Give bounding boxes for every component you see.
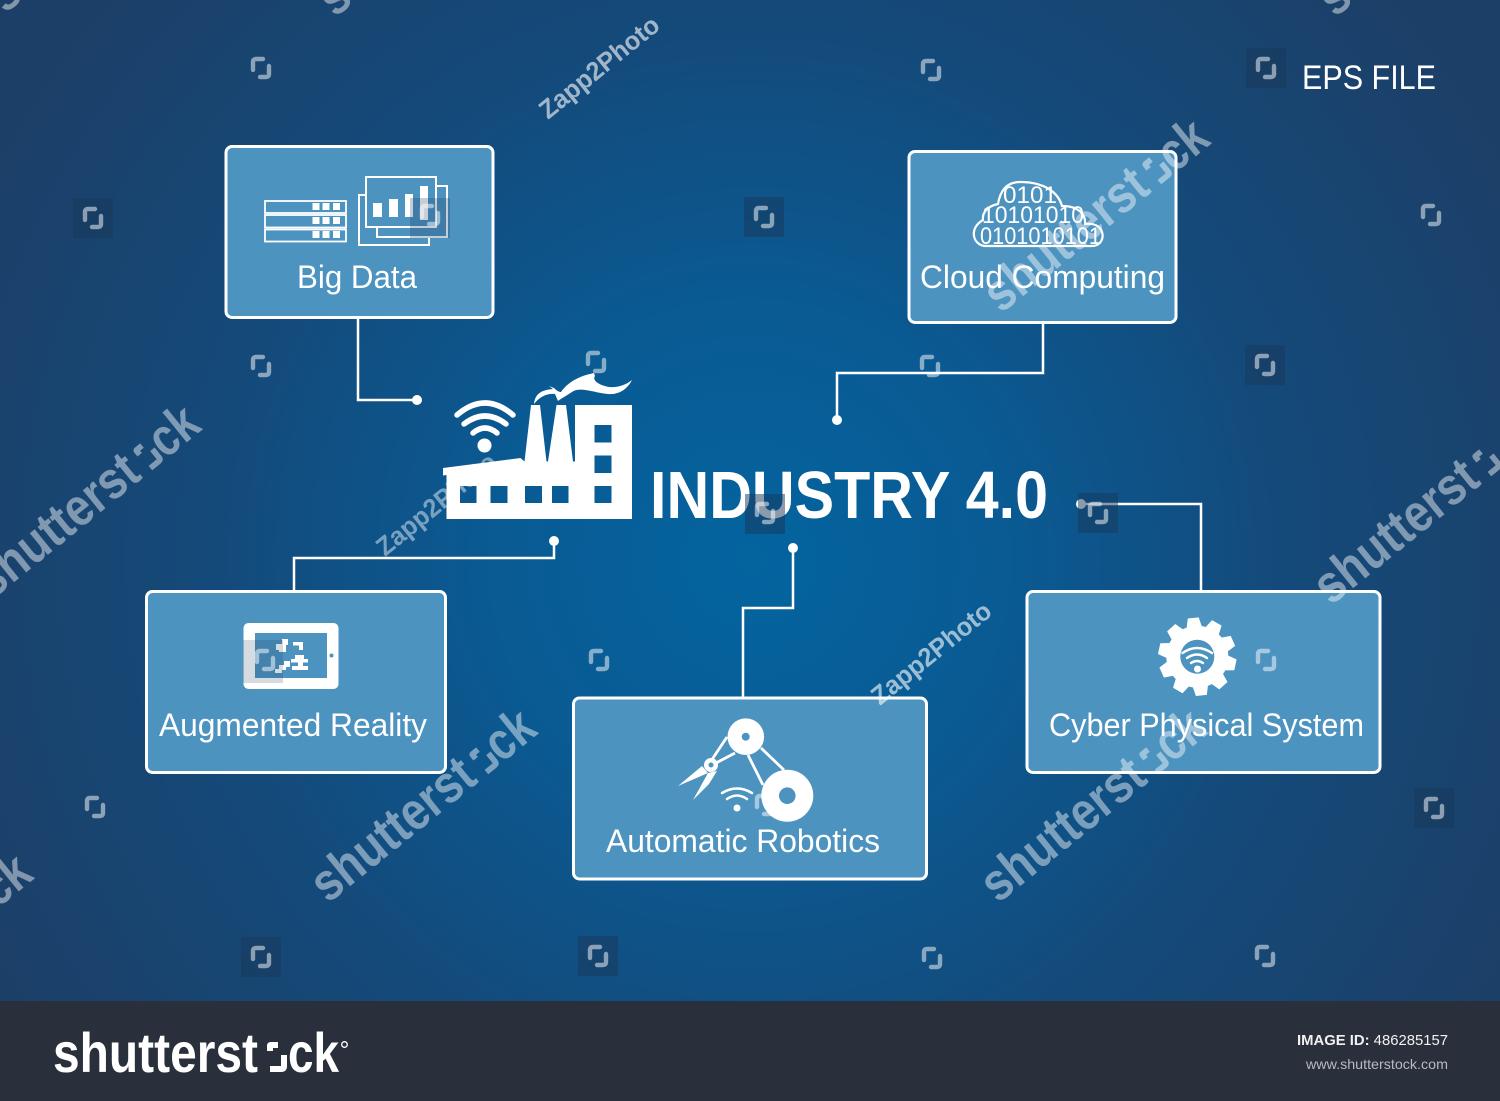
label: cyber physical system: Cyber Physical System bbox=[1049, 707, 1364, 743]
panel: cloud computing bbox=[909, 152, 1176, 322]
icon: tablet bbox=[244, 623, 338, 689]
title: INDUSTRY 4.0 bbox=[650, 458, 1048, 533]
label: automatic robotics: Automatic Robotics bbox=[606, 823, 880, 859]
watermark: stock logos: shutterst bbox=[968, 745, 1157, 913]
panel: big data bbox=[226, 146, 493, 318]
connector: cyber physical system bbox=[1076, 499, 1201, 591]
footer logo: shutterst bbox=[53, 1021, 258, 1084]
icon: binary cloud: 0101 bbox=[1003, 182, 1057, 209]
watermark: stock logos: ck bbox=[1145, 106, 1220, 183]
label: cloud computing: Cloud Computing bbox=[920, 259, 1165, 295]
icon: binary cloud: 0101010101 bbox=[980, 223, 1101, 250]
connector: augmented reality bbox=[294, 536, 559, 591]
icon: binary cloud: 10101010 bbox=[982, 202, 1084, 229]
watermark: stock logos: shutterst bbox=[971, 155, 1160, 323]
icon: server and charts bbox=[265, 177, 447, 245]
watermark: contributor names: Zapp2Photo bbox=[865, 595, 997, 711]
connector: big data bbox=[358, 318, 422, 405]
icon: smart factory bbox=[443, 373, 632, 519]
watermark: stock logos: ck bbox=[136, 392, 211, 469]
icon: robot arm bbox=[678, 718, 813, 822]
website: www.shutterstock.com bbox=[1305, 1056, 1448, 1072]
panel: cyber physical system bbox=[1027, 592, 1380, 772]
label: augmented reality: Augmented Reality bbox=[159, 707, 427, 743]
icon: binary cloud bbox=[974, 182, 1103, 250]
watermark: contributor names bbox=[370, 9, 997, 711]
watermark: bracket marks bbox=[85, 59, 1442, 967]
watermark: contributor names: Zapp2Photo bbox=[370, 446, 502, 562]
footer logo: ck bbox=[288, 1021, 340, 1084]
watermark: contributor names: Zapp2Photo bbox=[533, 9, 665, 125]
file format label: EPS FILE bbox=[1302, 59, 1436, 97]
connector: cloud computing bbox=[832, 323, 1043, 425]
panel: augmented reality bbox=[146, 592, 446, 772]
connector: automatic robotics bbox=[743, 543, 798, 698]
image id: IMAGE ID: 486285157 bbox=[1297, 1032, 1448, 1049]
panel: automatic robotics bbox=[574, 698, 926, 879]
footer bar bbox=[0, 1001, 1500, 1101]
watermark: stock logos: shutterst bbox=[298, 745, 487, 913]
watermark: dark squares bbox=[73, 48, 1454, 977]
watermark: stock logos: ck bbox=[472, 696, 547, 773]
label: big data: Big Data bbox=[297, 259, 417, 295]
watermark: stock logos: ck bbox=[1142, 696, 1217, 773]
icon: gear with wifi bbox=[1157, 617, 1237, 696]
icon: wifi signal bbox=[457, 403, 513, 452]
